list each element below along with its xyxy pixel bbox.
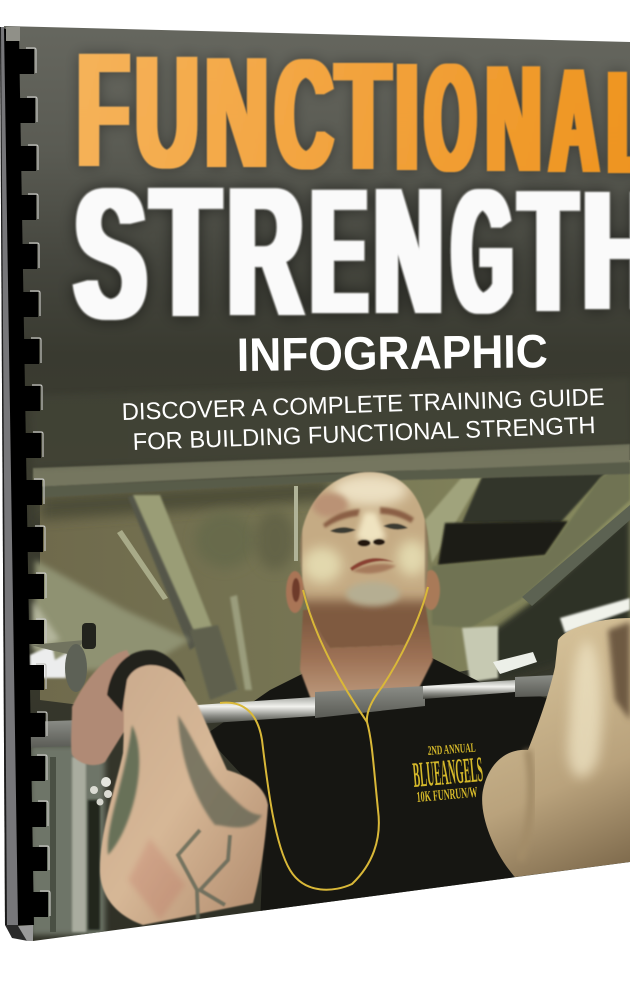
title: FUNCTIONAL: F xyxy=(77,18,129,201)
subtitle: FOR BUILDING FUNCTIONAL STRENGTH xyxy=(132,412,596,456)
man: neck xyxy=(300,600,433,702)
title: STRENGTH: G xyxy=(453,154,512,350)
man: head xyxy=(286,465,440,660)
heading: INFOGRAPHIC: INFOGRAPHIC xyxy=(236,324,548,381)
title: STRENGTH: T xyxy=(152,149,219,356)
title: FUNCTIONAL: C xyxy=(275,28,333,202)
title: FUNCTIONAL: N xyxy=(205,25,268,201)
subtitle: DISCOVER A COMPLETE TRAINING GUIDE xyxy=(121,384,605,426)
title: STRENGTH: S xyxy=(75,151,146,358)
face features xyxy=(323,509,360,528)
title: STRENGTH: N xyxy=(375,151,442,352)
ceiling pipes xyxy=(33,444,630,498)
man: right arm xyxy=(482,618,630,877)
title: STRENGTH: T xyxy=(520,153,576,348)
binding highlights xyxy=(26,48,50,916)
subtitle xyxy=(123,388,604,450)
band behind subtitle xyxy=(30,378,630,468)
binding tabs xyxy=(18,49,48,917)
title: FUNCTIONAL: I xyxy=(395,31,418,203)
title: FUNCTIONAL: T xyxy=(336,30,390,202)
barbell xyxy=(25,675,556,748)
right ceiling xyxy=(425,477,482,563)
shirt logo text xyxy=(412,743,483,802)
title: FUNCTIONAL: O xyxy=(425,32,476,204)
rack below left arm xyxy=(30,745,105,935)
title: STRENGTH: R xyxy=(228,148,302,354)
man: left arm and hand xyxy=(71,650,268,925)
man: shirt xyxy=(205,657,555,925)
title: FUNCTIONAL: N xyxy=(486,34,541,204)
title: STRENGTH: E xyxy=(311,151,367,351)
shirt logo text: 2ND ANNUAL xyxy=(427,740,476,758)
shirt logo text: 10K FUNRUN/W xyxy=(416,785,478,806)
gym ceiling background xyxy=(30,460,630,935)
earphone wire xyxy=(220,587,428,890)
title: FUNCTIONAL: U xyxy=(135,22,199,201)
spiral binding spine xyxy=(0,27,50,941)
